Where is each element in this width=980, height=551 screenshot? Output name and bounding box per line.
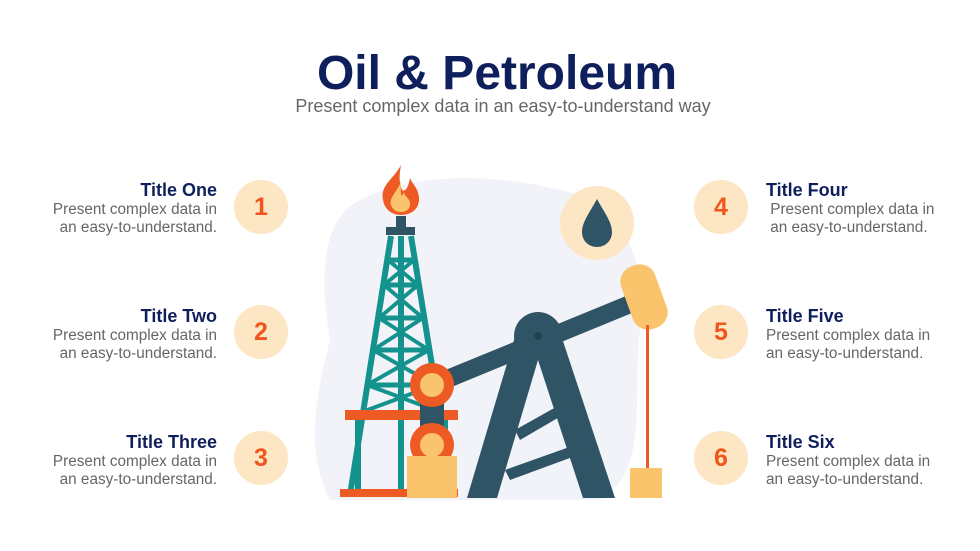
item 4 text: Present complex data in — [770, 201, 934, 218]
horse head — [616, 260, 672, 334]
item 1 text: an easy-to-understand. — [60, 219, 217, 236]
item 6 text: Title Six — [766, 432, 835, 452]
item 4 text: an easy-to-understand. — [770, 219, 928, 236]
item 1 text: Title One — [140, 180, 217, 200]
item 4 text — [766, 180, 934, 236]
counterweight — [630, 468, 662, 498]
item 3 text: Title Three — [126, 432, 217, 452]
number 5: 5 — [714, 318, 728, 346]
item 4 text: Title Four — [766, 180, 848, 200]
pump jack beam — [440, 300, 640, 382]
icon: oil drop — [560, 186, 634, 260]
title: Oil & Petroleum — [317, 47, 677, 100]
item 5 text: Title Five — [766, 306, 844, 326]
item 2 text — [53, 306, 217, 362]
item 6 text: Present complex data in — [766, 453, 930, 470]
tower cap — [386, 227, 415, 235]
number 6: 6 — [714, 444, 728, 472]
number 5 — [694, 305, 748, 359]
item 6 text: an easy-to-understand. — [766, 471, 923, 488]
item 1 text — [53, 180, 217, 236]
number 2 — [234, 305, 288, 359]
item 5 text: Present complex data in — [766, 327, 930, 344]
item 3 text: an easy-to-understand. — [60, 471, 217, 488]
item 1 text: Present complex data in — [53, 201, 217, 218]
number 4 — [694, 180, 748, 234]
crank connector — [420, 385, 444, 445]
item 2 text: Title Two — [141, 306, 217, 326]
item 2 text: an easy-to-understand. — [60, 345, 217, 362]
background blob — [315, 178, 642, 500]
subtitle: Present complex data in an easy-to-understand way — [295, 96, 711, 116]
item 5 text — [766, 306, 930, 362]
A-frame — [467, 312, 615, 498]
yellow base — [407, 456, 457, 498]
item 3 text — [53, 432, 217, 488]
number 4: 4 — [714, 193, 728, 221]
number 1: 1 — [254, 193, 268, 221]
number 3 — [234, 431, 288, 485]
number 2: 2 — [254, 318, 268, 346]
item 6 text — [766, 432, 930, 488]
crank circles — [410, 363, 454, 407]
icon: oil rig tower — [350, 236, 453, 495]
item 2 text: Present complex data in — [53, 327, 217, 344]
item 3 text: Present complex data in — [53, 453, 217, 470]
number 1 — [234, 180, 288, 234]
icon: flame — [383, 165, 419, 215]
number 6 — [694, 431, 748, 485]
number 3: 3 — [254, 444, 268, 472]
orange bars — [345, 410, 458, 420]
item 5 text: an easy-to-understand. — [766, 345, 923, 362]
polished rod — [646, 325, 649, 470]
